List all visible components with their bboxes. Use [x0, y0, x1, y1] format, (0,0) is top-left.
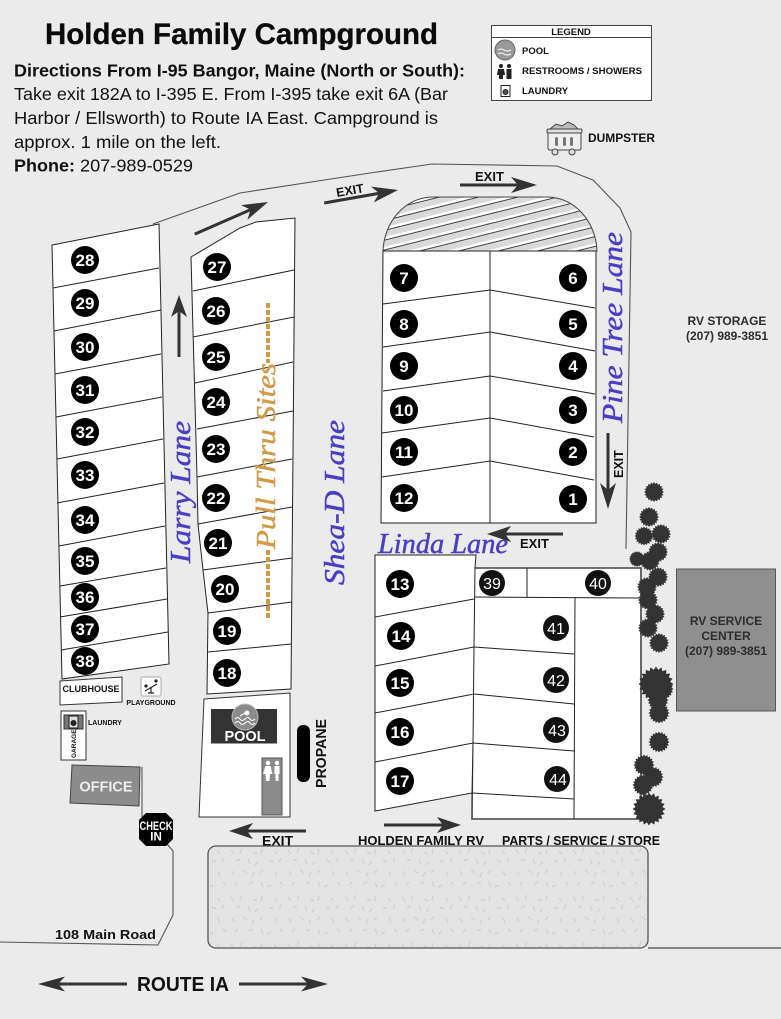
legend [492, 26, 652, 100]
site 36: 36 [76, 588, 94, 607]
site 19 [213, 617, 241, 645]
building: laundry and garage: GARAGE [71, 729, 78, 758]
site 10 [390, 396, 418, 424]
site 43: 43 [548, 723, 566, 740]
legend icon: restrooms [497, 64, 512, 79]
site 20: 20 [216, 580, 234, 599]
site 16 [386, 718, 414, 746]
directions text block: Directions From I-95 Bangor, Maine (North or South): [14, 60, 465, 80]
directions text block: Phone: [14, 156, 75, 176]
site 29: 29 [76, 294, 94, 313]
icon: playground [141, 677, 161, 696]
site 1: 1 [568, 490, 578, 509]
lane label: Shea-D Lane: Shea-D Lane [320, 420, 351, 585]
sign: check in: CHECK [140, 821, 173, 833]
building: RV service center: RV SERVICE [690, 614, 762, 628]
label: RV storage [686, 314, 768, 343]
site 11: 11 [395, 443, 413, 462]
site 40 [585, 570, 611, 596]
arrow: Holden Family RV east [384, 817, 461, 833]
site 35 [71, 547, 99, 575]
site 5 [559, 310, 587, 338]
site 30 [71, 333, 99, 361]
site 29 [71, 289, 99, 317]
site 44 [544, 766, 570, 792]
pull thru dashed line [266, 303, 270, 620]
panel: sites 28-38 [52, 224, 169, 679]
site 41: 41 [547, 621, 565, 638]
site 19: 19 [218, 622, 236, 641]
label: exit south: EXIT [612, 450, 626, 478]
sign: check in: IN [150, 832, 162, 844]
site 33 [71, 461, 99, 489]
site 21 [204, 529, 232, 557]
site 43 [543, 717, 569, 743]
site 23 [202, 435, 230, 463]
site 18: 18 [218, 664, 236, 683]
panel: pull thru sites 18-27 [191, 218, 295, 694]
label: south exit: EXIT [262, 832, 294, 848]
legend label: laundry: LAUNDRY [522, 86, 569, 97]
lane label: Linda Lane: Linda Lane [377, 529, 508, 560]
building: RV service center: CENTER [701, 629, 751, 643]
label: route 1A: ROUTE IA [137, 974, 229, 996]
arrow: Pine Tree Lane south [600, 433, 616, 509]
label: propane: PROPANE [313, 719, 330, 788]
building: office: OFFICE [79, 780, 133, 796]
label: exit east: EXIT [475, 169, 504, 184]
site 18 [213, 659, 241, 687]
site 13 [386, 570, 414, 598]
label: parts service store: PARTS / SERVICE / STORE [502, 833, 660, 848]
site 10: 10 [395, 401, 413, 420]
site 37 [71, 615, 99, 643]
label: playground: PLAYGROUND [126, 700, 176, 707]
site 32: 32 [76, 423, 94, 442]
site 8 [390, 310, 418, 338]
label: pull thru sites: Pull Thru Sites [251, 363, 281, 550]
label: exit northeast: EXIT [335, 181, 365, 200]
site 9 [390, 352, 418, 380]
building: laundry and garage [61, 711, 86, 760]
trees along east boundary [629, 482, 674, 826]
directions text block: 207-989-0529 [80, 156, 193, 176]
site 28: 28 [76, 251, 94, 270]
lane label: Larry Lane: Larry Lane [166, 421, 197, 564]
legend icon: pool [495, 40, 515, 60]
directions text block: Harbor / Ellsworth) to Route IA East. Campground is [14, 108, 438, 128]
site 42: 42 [547, 673, 565, 690]
legend: LEGEND [551, 27, 591, 38]
site 12 [390, 484, 418, 512]
site 3: 3 [568, 401, 578, 420]
site 15 [386, 669, 414, 697]
site 6: 6 [568, 269, 578, 288]
legend icon: laundry [501, 86, 510, 96]
site 17 [386, 767, 414, 795]
site 40: 40 [589, 576, 607, 593]
label: exit Linda Lane: EXIT [520, 536, 549, 551]
arrow: route east [239, 976, 328, 992]
hatched area [383, 197, 597, 251]
road outline north [153, 164, 631, 549]
road outline entrance [141, 767, 143, 817]
building: clubhouse [60, 677, 122, 705]
site 4: 4 [568, 357, 578, 376]
site 26: 26 [207, 302, 225, 321]
site 33: 33 [76, 466, 94, 485]
arrow: Linda Lane west [487, 526, 563, 542]
site 1 [559, 485, 587, 513]
arrow: exit northeast [323, 182, 399, 211]
panel: RV lot sites 39-44 [472, 568, 641, 819]
panel: sites 1-12 [381, 251, 596, 523]
site 20 [211, 575, 239, 603]
site 37: 37 [76, 620, 94, 639]
road edge east [648, 947, 781, 949]
site 2: 2 [568, 443, 578, 462]
site 2 [559, 438, 587, 466]
restroom building [262, 758, 282, 815]
site 8: 8 [399, 315, 409, 334]
gravel area [208, 846, 648, 948]
site 11 [390, 438, 418, 466]
directions text block [14, 60, 465, 176]
site 4 [559, 352, 587, 380]
site 35: 35 [76, 552, 94, 571]
site 39 [479, 570, 505, 596]
site 34 [71, 506, 99, 534]
arrow: Larry Lane north [171, 295, 187, 357]
site 25: 25 [207, 348, 225, 367]
building: office [70, 765, 140, 806]
icon: dumpster [547, 122, 582, 155]
site 7 [390, 264, 418, 292]
address label: 108 Main Road [55, 927, 156, 942]
site 27: 27 [208, 258, 226, 277]
site 7: 7 [399, 269, 409, 288]
site 23: 23 [207, 440, 225, 459]
site 31 [71, 376, 99, 404]
site 36 [71, 583, 99, 611]
label: RV storage: RV STORAGE [688, 314, 766, 328]
arrow: route west [38, 976, 127, 992]
propane tank [297, 725, 310, 782]
site 22: 22 [207, 489, 225, 508]
site 26 [202, 297, 230, 325]
panel: pool area [199, 693, 290, 817]
directions text block: approx. 1 mile on the left. [14, 132, 221, 152]
site 38: 38 [76, 652, 94, 671]
building: clubhouse: CLUBHOUSE [62, 684, 120, 694]
label: RV storage: (207) 989-3851 [686, 329, 768, 343]
site 5: 5 [568, 315, 578, 334]
site 14 [387, 622, 415, 650]
arrow: exit east [460, 177, 537, 193]
label: Holden Family RV: HOLDEN FAMILY RV [358, 833, 484, 848]
site 13: 13 [391, 575, 409, 594]
panel: sites 13-17 [375, 555, 476, 811]
legend label: restrooms: RESTROOMS / SHOWERS [522, 66, 642, 77]
site 9: 9 [399, 357, 409, 376]
site 42 [543, 667, 569, 693]
site 14: 14 [392, 627, 411, 646]
site 39: 39 [483, 576, 501, 593]
site 31: 31 [76, 381, 94, 400]
arrow: entry northeast [192, 195, 271, 241]
site 15: 15 [391, 674, 409, 693]
site 6 [559, 264, 587, 292]
site 16: 16 [391, 723, 409, 742]
site 28 [71, 246, 99, 274]
site 44: 44 [549, 772, 567, 789]
site 41 [543, 615, 569, 641]
site 38 [71, 647, 99, 675]
legend label: pool: POOL [522, 46, 549, 57]
label: dumpster: DUMPSTER [588, 131, 655, 145]
site 30: 30 [76, 338, 94, 357]
site 21: 21 [209, 534, 227, 553]
arrow: south exit west [229, 823, 306, 839]
road outline south [0, 844, 173, 945]
sign: check in [139, 813, 173, 846]
lane label: Pine Tree Lane: Pine Tree Lane [598, 232, 629, 424]
site 24 [202, 388, 230, 416]
site 27 [203, 253, 231, 281]
label: laundry: LAUNDRY [88, 720, 122, 727]
site 12: 12 [395, 489, 413, 508]
building: RV service center: (207) 989-3851 [685, 644, 767, 658]
site 32 [71, 418, 99, 446]
pool sign: POOL [224, 729, 266, 745]
title: Holden Family Campground [45, 18, 438, 51]
site 34: 34 [76, 511, 95, 530]
site 25 [202, 343, 230, 371]
building: RV service center [676, 569, 776, 711]
site 22 [202, 484, 230, 512]
site 17: 17 [391, 772, 409, 791]
site 24: 24 [207, 393, 226, 412]
site 3 [559, 396, 587, 424]
directions text block: Take exit 182A to I-395 E. From I-395 take exit 6A (Bar [14, 84, 448, 104]
